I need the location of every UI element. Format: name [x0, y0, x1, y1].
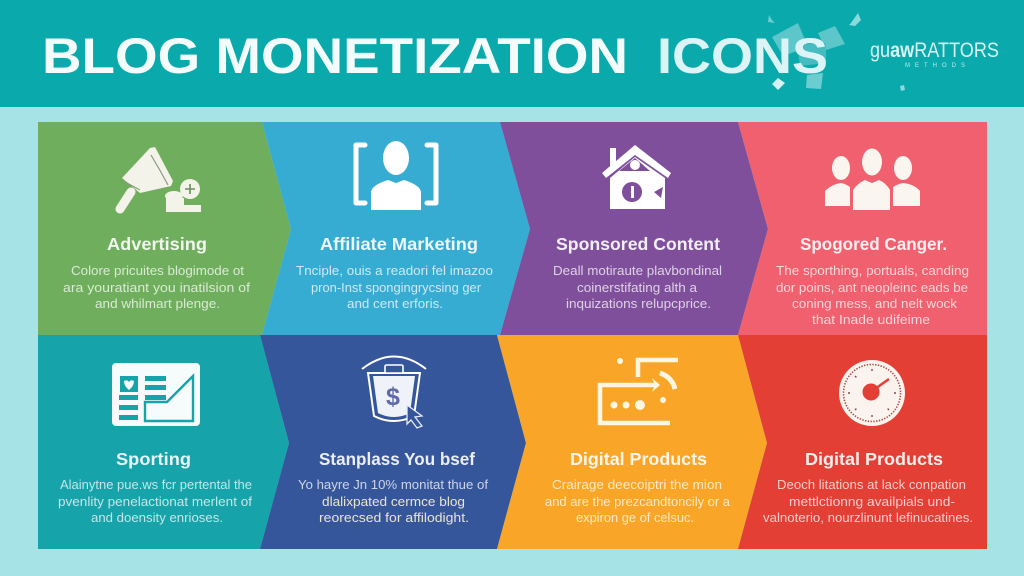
panel: sponsored changer [738, 122, 987, 335]
panel: sponsored content [500, 122, 768, 335]
description: digital products orange: expiron ge of celsuc. [576, 511, 694, 525]
description: digital products orange [545, 478, 730, 525]
description: sponsored content [553, 264, 722, 311]
panel: affiliate marketing [262, 122, 530, 335]
header band [0, 0, 1024, 107]
description: digital products orange: and are the prezcandtoncily or a [545, 495, 730, 509]
description: sponsored changer [776, 264, 969, 327]
description: sporting [58, 478, 253, 525]
description: sponsored changer: that Inade udifeime [812, 313, 930, 327]
description: sporting: and doensity enrioses. [91, 511, 223, 525]
title [42, 28, 828, 84]
icon: three people [825, 148, 920, 210]
description: sporting: pvenlity penelactionat merlent of [58, 495, 253, 509]
icon: person in brackets [356, 141, 436, 210]
description: stanplass: reorecsed for affilodight. [319, 511, 469, 525]
icon: clipboard with dollar and cursor: $ [386, 383, 400, 411]
icon: transfer window [600, 358, 678, 423]
description: affiliate marketing: Tnciple, ouis a readori fel imazoo [296, 264, 493, 278]
heading: stanplass: Stanplass You bsef [319, 449, 475, 469]
description: digital products red [763, 478, 973, 525]
icon: megaphone with coins [120, 147, 201, 212]
heading: advertising: Advertising [107, 234, 207, 254]
description: sponsored content: Deall motiraute plavbondinal [553, 264, 722, 278]
description: digital products orange: Crairage deecoiptri the mion [552, 478, 722, 492]
description: stanplass [298, 478, 489, 525]
title: BLOG MONETIZATION [42, 28, 628, 84]
description: sponsored content: coinerstifating alth a [577, 281, 697, 295]
logo: guawRATTORS [870, 39, 999, 62]
panel: stanplass [260, 335, 526, 549]
description: digital products red: mettlctionng availpials und- [789, 495, 955, 509]
description: sponsored content: inquizations relupcprice. [566, 297, 711, 311]
description: sponsored changer: The sporthing, portuals, canding [776, 264, 969, 278]
description: advertising [63, 264, 251, 311]
heading: sporting: Sporting [116, 449, 191, 469]
icon: clipboard with dollar and cursor [362, 356, 426, 428]
description: digital products red: Deoch litations at lack conpation [777, 478, 966, 492]
description: affiliate marketing: pron-Inst spongingrycsing ger [311, 281, 481, 295]
description: affiliate marketing: and cent erforis. [347, 297, 443, 311]
description: stanplass: dlalixpated cermce blog [322, 495, 465, 509]
panel: sporting [38, 335, 289, 549]
description: digital products red: valnoterio, nourzlinunt lefinucatines. [763, 511, 973, 525]
description: stanplass: Yo hayre Jn 10% monitat thue of [298, 478, 489, 492]
description: advertising: Colore pricuites blogimode ot [71, 264, 245, 278]
panel: advertising [38, 122, 291, 335]
description: affiliate marketing [296, 264, 493, 311]
description: advertising: and whilmart plenge. [95, 297, 220, 311]
description: advertising: ara youratiant you inatilsion of [63, 281, 251, 295]
title: ICONS [657, 28, 828, 84]
icon: gauge [839, 360, 905, 426]
icon: form card [112, 363, 200, 426]
heading: digital products red: Digital Products [805, 449, 943, 469]
heading: sponsored changer: Spogored Canger. [800, 234, 947, 254]
heading: sponsored content: Sponsored Content [556, 234, 720, 254]
panel: digital products red [738, 335, 987, 549]
icon: house [602, 145, 671, 209]
logo: METHODS [905, 63, 965, 69]
panel: digital products orange [497, 335, 767, 549]
description: sponsored changer: dor poins, ant neopleinc eads be [776, 281, 968, 295]
heading: digital products orange: Digital Products [570, 449, 707, 469]
description: sponsored changer: coning mess, and nelt wock [792, 297, 958, 311]
description: sporting: Alainytne pue.ws fcr pertental the [60, 478, 252, 492]
heading: affiliate marketing: Affiliate Marketing [320, 234, 478, 254]
